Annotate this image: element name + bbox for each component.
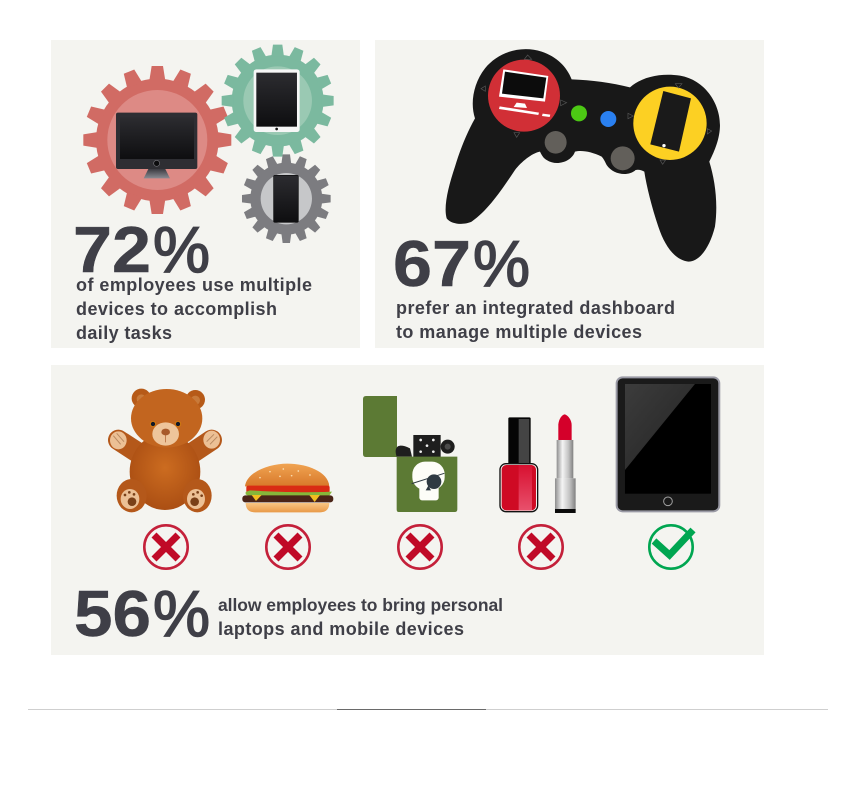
right thumbstick	[611, 146, 635, 170]
footer divider	[28, 709, 828, 710]
stat: 72%	[73, 213, 210, 286]
icon: teddy bear	[110, 389, 220, 512]
icon: gray gear with phone	[242, 154, 331, 243]
text: dashboard description: to manage multiple devices	[396, 322, 642, 342]
text: multiple devices description: devices to accomplish	[76, 299, 277, 319]
icon: green gear with tablet	[222, 45, 334, 157]
icon: cross mark lighter	[398, 525, 442, 569]
text: personal devices description: laptops and mobile devices	[218, 619, 464, 639]
button: red with monitor	[488, 60, 560, 132]
gears illustration	[83, 45, 334, 243]
button: blue	[600, 111, 616, 127]
text: multiple devices description: of employees use multiple	[76, 275, 312, 295]
text: personal devices description: allow employees to bring personal	[218, 595, 503, 615]
text: multiple devices description: daily tasks	[76, 323, 172, 343]
stat: 56%: %	[153, 577, 210, 650]
text: dashboard description: prefer an integrated dashboard	[396, 298, 675, 318]
icon: burger	[242, 464, 333, 512]
text: dashboard description	[396, 298, 675, 342]
text: personal devices description	[218, 595, 503, 639]
panel: multiple devices	[51, 40, 360, 348]
stat: 67%: %	[473, 227, 530, 300]
text: multiple devices description	[76, 275, 312, 343]
stat: 72%: %	[153, 213, 210, 286]
stat: 56%	[74, 577, 210, 650]
button: green	[571, 105, 587, 121]
left thumbstick	[545, 131, 567, 154]
stat: 56%: 56	[74, 577, 151, 650]
icon: cross mark cosmetics	[519, 525, 563, 569]
icon: tablet	[617, 377, 719, 511]
icon: game controller	[446, 49, 720, 262]
stat: 72%: 72	[73, 213, 151, 286]
stat: 67%: 67	[393, 227, 471, 300]
button: yellow with phone	[633, 87, 707, 160]
icon: nail polish and lipstick	[500, 414, 576, 513]
stat: 67%	[393, 227, 530, 300]
icon: red gear with monitor	[83, 66, 231, 214]
panel: personal devices	[51, 365, 764, 655]
icon: cross mark burger	[266, 525, 310, 569]
panel: integrated dashboard	[375, 40, 764, 348]
icon: lighter with skull	[363, 396, 457, 512]
icon: cross mark bear	[144, 525, 188, 569]
icon: check mark tablet	[649, 525, 693, 569]
